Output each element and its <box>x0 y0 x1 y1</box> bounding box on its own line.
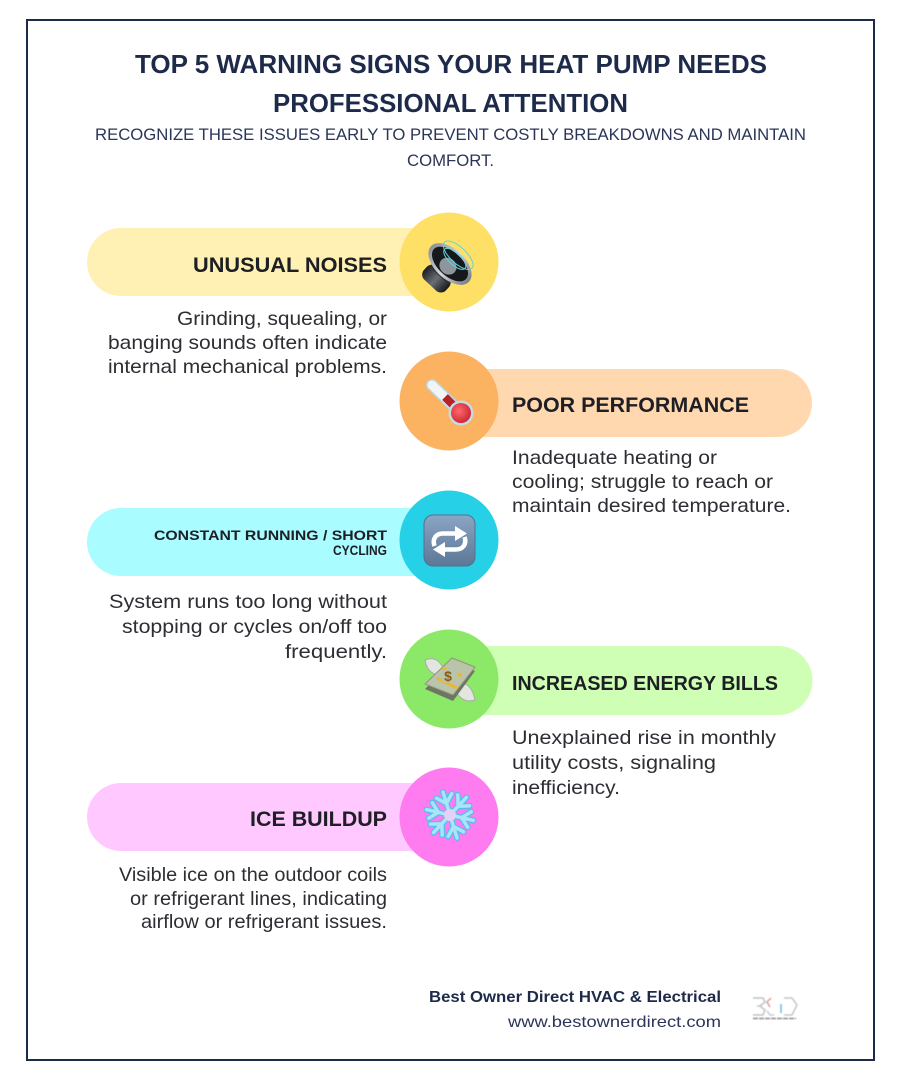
panel: poor performance <box>400 352 812 517</box>
pill: energy bills heading <box>460 646 813 715</box>
description: constant running: System runs too long without <box>109 591 388 613</box>
description: unusual noises: banging sounds often indicate <box>108 332 387 354</box>
title: TOP 5 WARNING SIGNS YOUR HEAT PUMP NEEDS <box>135 49 767 79</box>
pill: energy bills heading: INCREASED ENERGY BILLS <box>512 673 778 695</box>
footer website: www.bestownerdirect.com <box>507 1014 721 1031</box>
description: energy bills <box>512 727 776 799</box>
icon circle: money with wings: $ <box>444 668 452 684</box>
panel: ice buildup <box>87 768 498 933</box>
description: ice buildup: Visible ice on the outdoor coils <box>119 864 387 886</box>
pill: ice buildup heading: ICE BUILDUP <box>250 808 387 831</box>
icon circle: thermometer <box>400 352 498 450</box>
pill: poor performance heading <box>460 369 812 437</box>
description: constant running: stopping or cycles on/off too <box>122 616 387 638</box>
description: energy bills: inefficiency. <box>512 777 620 799</box>
title <box>135 49 767 118</box>
pill: constant running heading <box>87 508 440 576</box>
footer company name: Best Owner Direct HVAC & Electrical <box>429 989 721 1006</box>
description: energy bills: utility costs, signaling <box>512 752 716 774</box>
description: unusual noises: Grinding, squealing, or <box>177 308 388 330</box>
icon circle: money with wings <box>400 630 498 728</box>
description: unusual noises: internal mechanical problems. <box>108 356 387 378</box>
description: poor performance: Inadequate heating or <box>512 447 718 469</box>
pill: unusual noises heading <box>87 228 440 296</box>
subtitle <box>95 125 806 170</box>
description: unusual noises <box>108 308 388 378</box>
description: poor performance: cooling; struggle to reach or <box>512 471 774 493</box>
description: energy bills: Unexplained rise in monthly <box>512 727 776 749</box>
icon circle: speaker <box>400 212 498 312</box>
description: ice buildup: or refrigerant lines, indicating <box>130 888 387 910</box>
icon circle: snowflake <box>400 768 498 866</box>
description: poor performance <box>512 447 791 517</box>
panel: unusual noises <box>87 212 499 378</box>
description: ice buildup: airflow or refrigerant issues. <box>141 911 387 933</box>
description: constant running: frequently. <box>285 641 387 663</box>
pill: unusual noises heading: UNUSUAL NOISES <box>193 254 387 277</box>
icon circle: repeat button <box>400 490 498 590</box>
panel: increased energy bills <box>400 630 813 799</box>
description: constant running <box>109 591 388 663</box>
pill: constant running heading: CONSTANT RUNNING / SHORT <box>154 527 388 543</box>
pill: constant running heading: CYCLING <box>333 542 387 558</box>
logo <box>753 998 797 1018</box>
description: poor performance: maintain desired temperature. <box>512 495 791 517</box>
panel: constant running <box>87 490 498 663</box>
title: PROFESSIONAL ATTENTION <box>273 88 628 118</box>
pill: ice buildup heading <box>87 783 440 851</box>
pill: poor performance heading: POOR PERFORMANCE <box>512 394 749 417</box>
subtitle: COMFORT. <box>407 151 494 170</box>
subtitle: RECOGNIZE THESE ISSUES EARLY TO PREVENT COSTLY BREAKDOWNS AND MAINTAIN <box>95 125 806 144</box>
description: ice buildup <box>119 864 387 933</box>
